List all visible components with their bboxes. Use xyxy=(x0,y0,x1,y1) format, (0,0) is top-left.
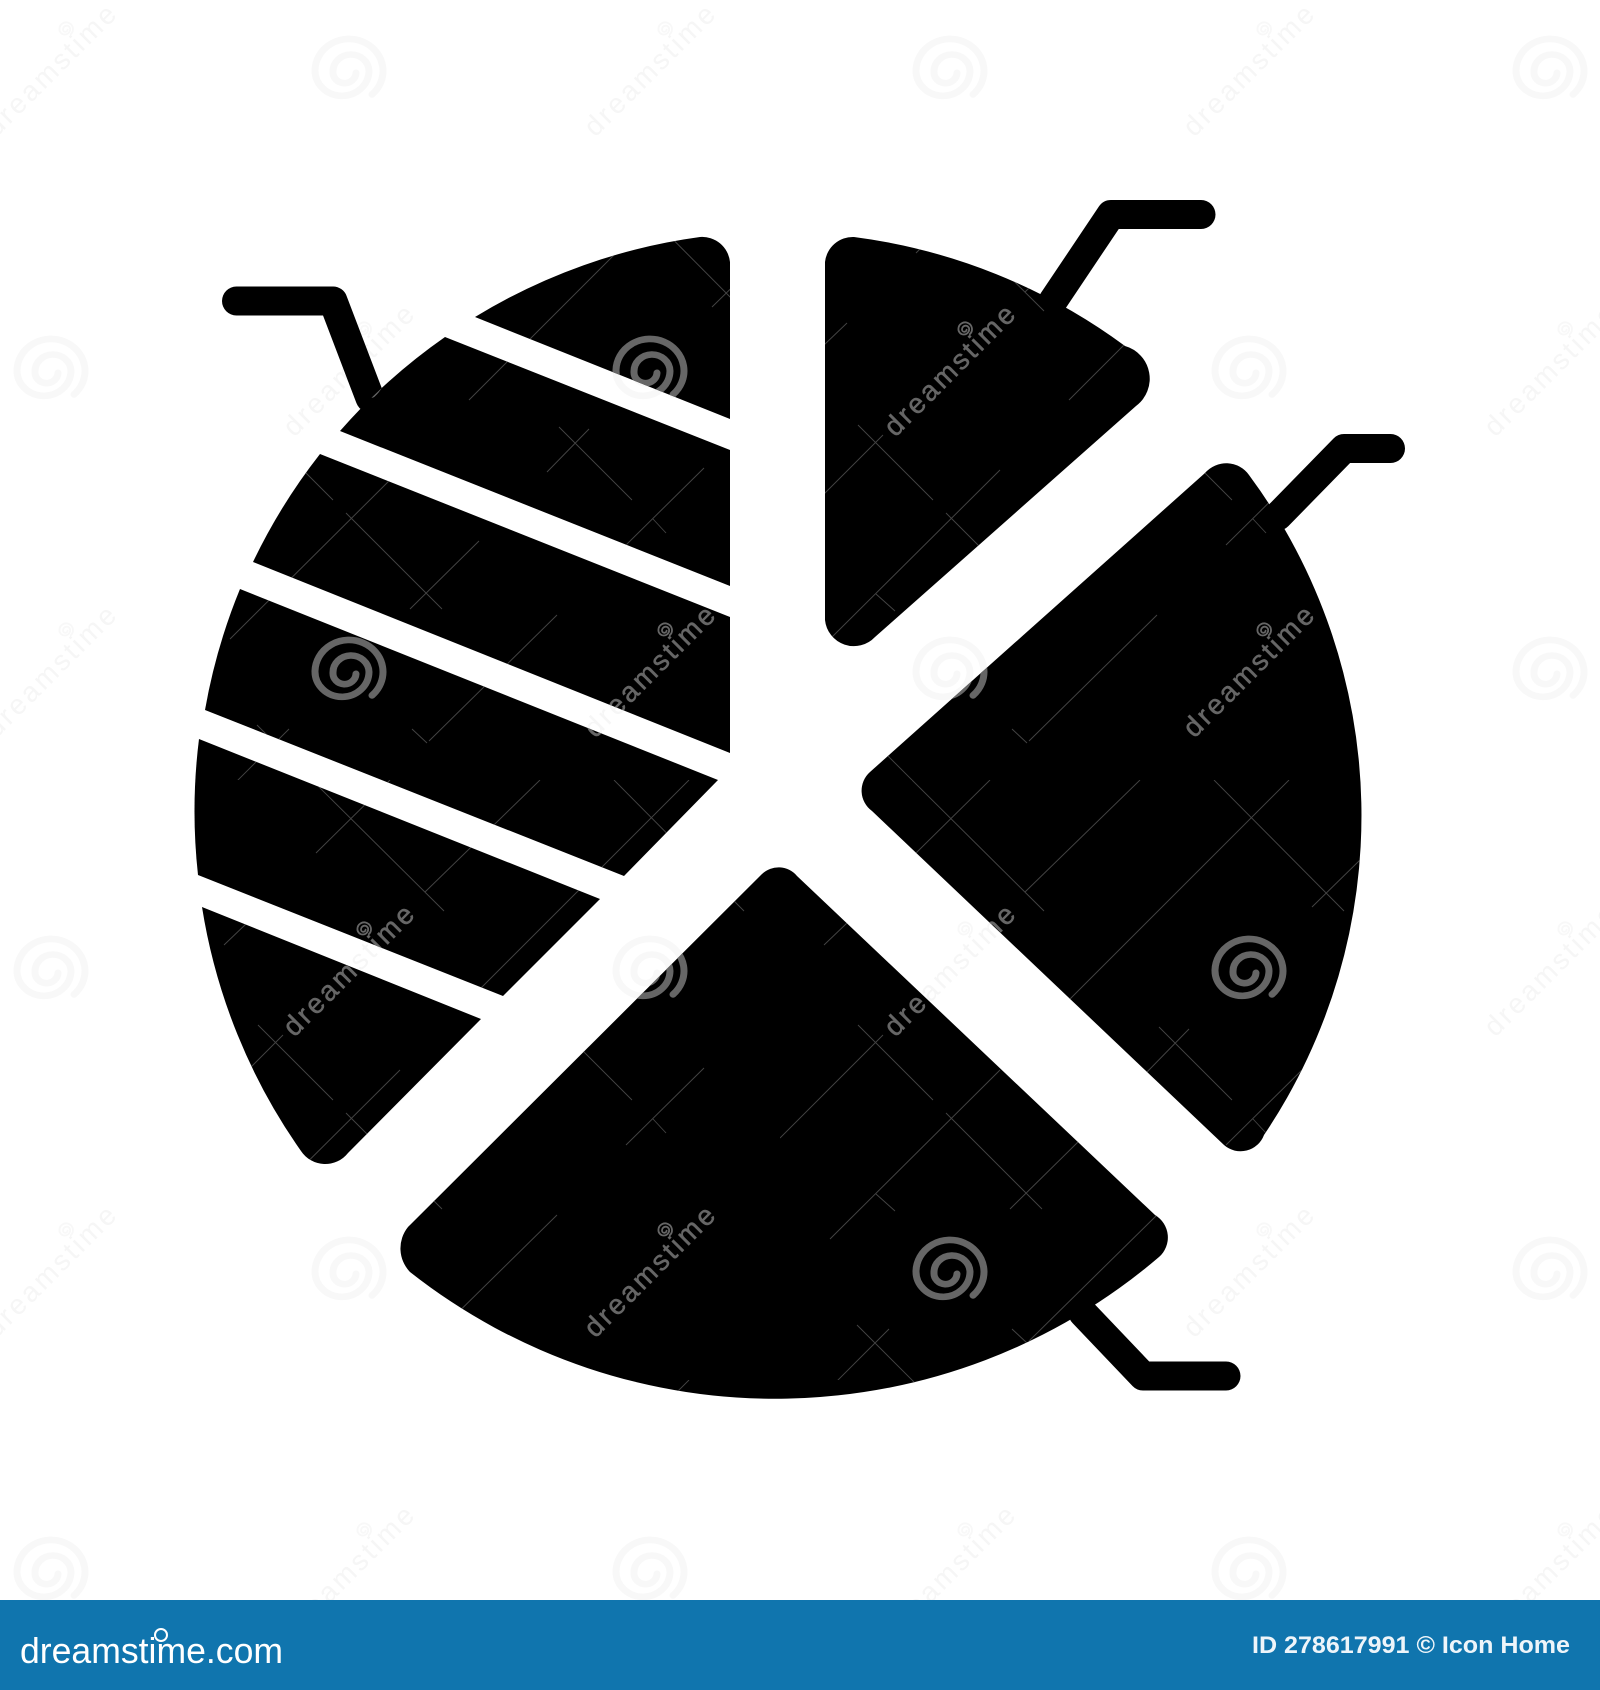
striped segment 5 xyxy=(194,739,600,996)
watermark layer on white: dreamstime xyxy=(277,1500,420,1643)
watermark layer on white: dreamstime xyxy=(878,899,1021,1042)
callout line: right xyxy=(1278,448,1390,516)
watermark layer on white: dreamstime xyxy=(878,299,1021,442)
top right wedge xyxy=(825,237,1150,646)
watermark layer on black: dreamstime xyxy=(878,899,1021,1042)
watermark layer on white: dreamstime xyxy=(878,1500,1021,1643)
watermark layer on white: dreamstime xyxy=(578,600,721,743)
footer credit: ID 278617991 © Icon Home xyxy=(1252,1632,1570,1659)
pie chart icon xyxy=(194,214,1390,1399)
watermark layer on white: dreamstime xyxy=(277,899,420,1042)
striped segment 1 xyxy=(475,237,730,419)
callout line: left xyxy=(236,301,370,398)
watermark layer on white: dreamstime xyxy=(277,299,420,442)
watermark layer on black: dreamstime xyxy=(578,1200,721,1343)
watermark layer on black: dreamstime xyxy=(1177,600,1320,743)
watermark layer on white: dreamstime xyxy=(578,1200,721,1343)
watermark layer on black: dreamstime xyxy=(878,299,1021,442)
striped segment 6 xyxy=(202,907,481,1164)
watermark layer on white: dreamstime xyxy=(1177,0,1320,142)
watermark layer on white: dreamstime xyxy=(1177,600,1320,743)
striped segment 2 xyxy=(340,337,730,586)
watermark layer on black: dreamstime xyxy=(277,899,420,1042)
watermark layer on black: dreamstime xyxy=(578,600,721,743)
footer bar xyxy=(0,1600,1600,1690)
watermark layer on black: dreamstime xyxy=(277,299,420,442)
right wedge xyxy=(862,463,1361,1151)
watermark layer on black xyxy=(224,241,1360,1391)
callout line: top right xyxy=(1053,214,1201,301)
footer logo: dreamstime.com xyxy=(20,1630,283,1671)
watermark layer on white: dreamstime xyxy=(1177,1200,1320,1343)
callout line: bottom xyxy=(1083,1313,1226,1376)
striped segment 4 xyxy=(205,589,718,876)
bottom wedge xyxy=(400,867,1168,1399)
striped segment 3 xyxy=(253,454,730,753)
watermark layer on white: dreamstime xyxy=(578,0,721,142)
